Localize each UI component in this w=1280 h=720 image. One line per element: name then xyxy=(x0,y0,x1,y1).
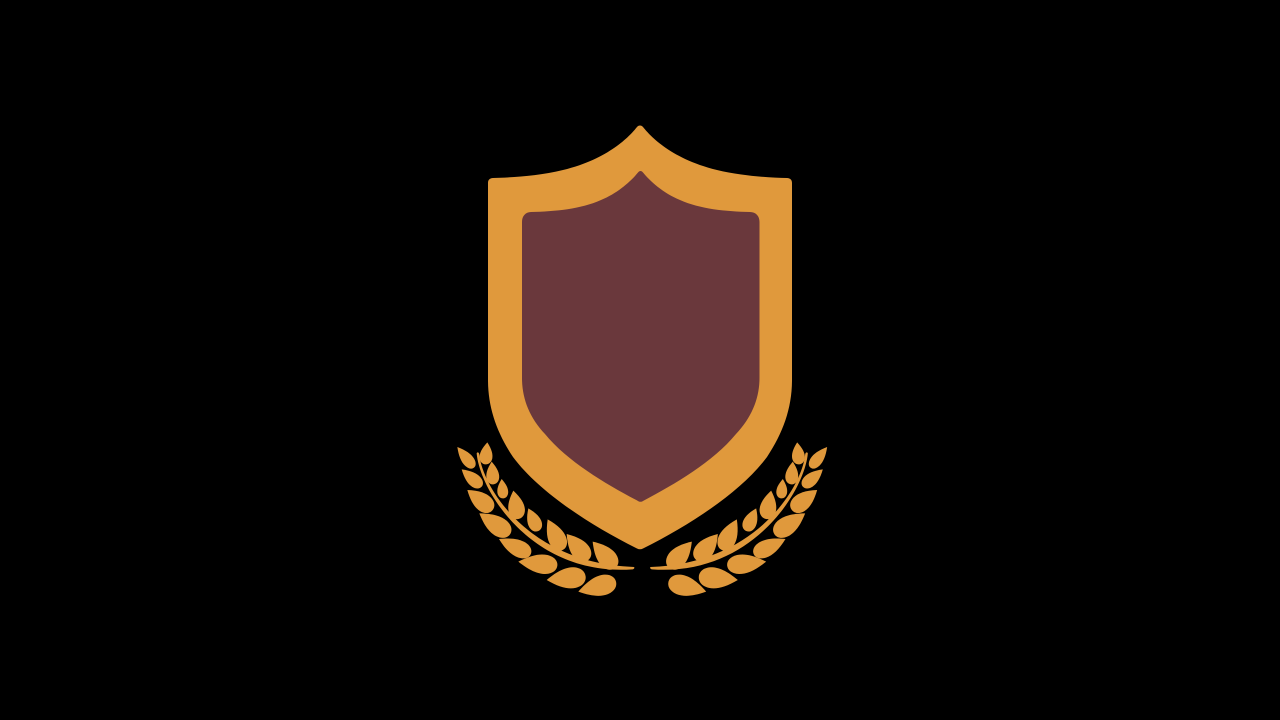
branch stem xyxy=(477,452,634,570)
shield: outer gold frame xyxy=(488,126,792,549)
wreath: left laurel branch xyxy=(453,442,634,601)
wreath: right laurel branch xyxy=(650,442,832,601)
branch stem xyxy=(650,452,808,570)
shield: inner maroon panel xyxy=(522,171,760,502)
